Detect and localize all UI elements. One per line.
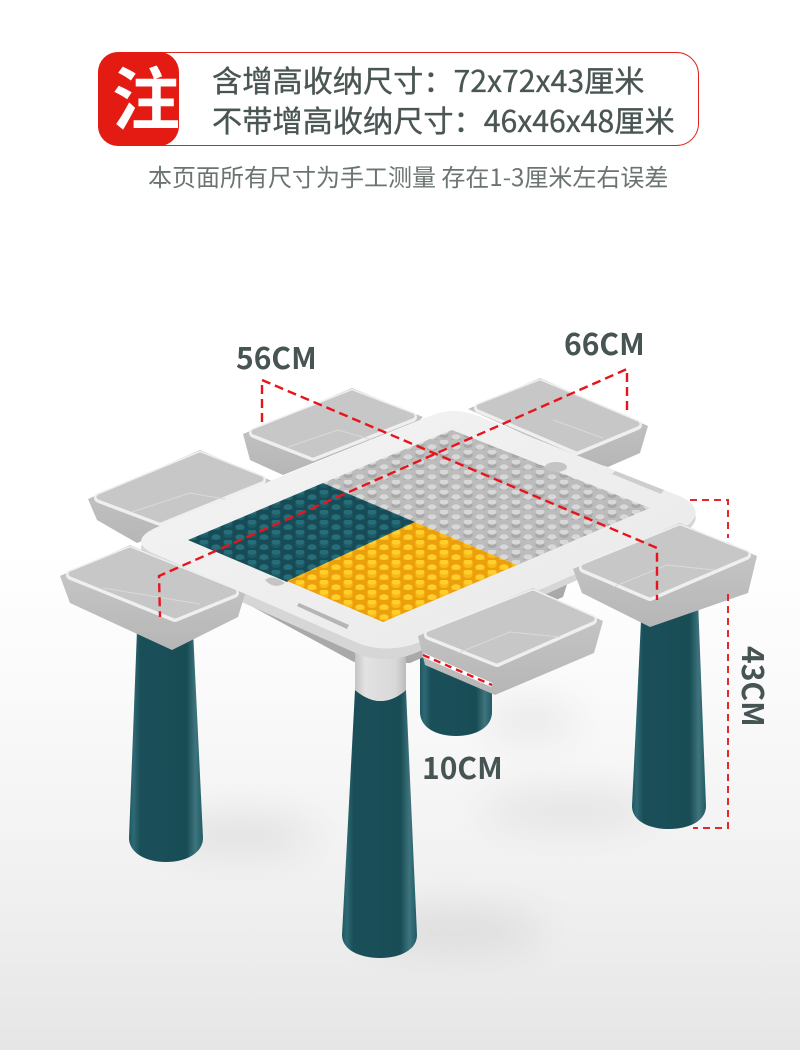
tray: front: [418, 588, 603, 695]
size without riser: 不带增高收纳尺寸：46x46x48厘米: [212, 97, 675, 141]
label: 56CM: 56CM: [236, 334, 317, 378]
leg: back: [420, 650, 492, 736]
label: 66CM: 66CM: [564, 320, 645, 364]
leg: right: [632, 600, 706, 829]
floor shadows: [165, 706, 660, 950]
dimension line: 10CM: [423, 655, 492, 685]
tray: right: [573, 523, 757, 627]
dimension line: 56CM: [262, 380, 657, 600]
label: 10CM: 10CM: [422, 744, 503, 788]
table top: [141, 411, 696, 659]
size with riser: 含增高收纳尺寸：72x72x43厘米: [212, 57, 644, 101]
tray: back right: [468, 378, 648, 467]
badge character: 注: [112, 45, 180, 144]
front finger hole: [265, 578, 285, 586]
teal building plate: [188, 483, 415, 582]
yellow building plate: [287, 522, 517, 622]
dimension line: 43CM: [690, 500, 728, 828]
back slot: [612, 471, 664, 494]
tray: back left: [88, 450, 272, 543]
back finger hole: [545, 462, 567, 472]
dimension line: 66CM: [159, 369, 627, 617]
banner outline: [98, 52, 698, 146]
tray: back middle: [243, 388, 423, 475]
note banner: [98, 45, 698, 146]
gray building plate: [323, 430, 650, 565]
measurement disclaimer: 本页面所有尺寸为手工测量 存在1-3厘米左右误差: [148, 158, 668, 193]
leg: front left: [129, 630, 203, 862]
tray: front left: [60, 545, 245, 650]
label: 43CM: 43CM: [733, 646, 777, 727]
grey collar: [355, 650, 406, 701]
red note badge: [98, 52, 179, 146]
front slot: [297, 603, 349, 629]
leg: front centre: [342, 650, 417, 958]
table underside: [240, 575, 570, 663]
